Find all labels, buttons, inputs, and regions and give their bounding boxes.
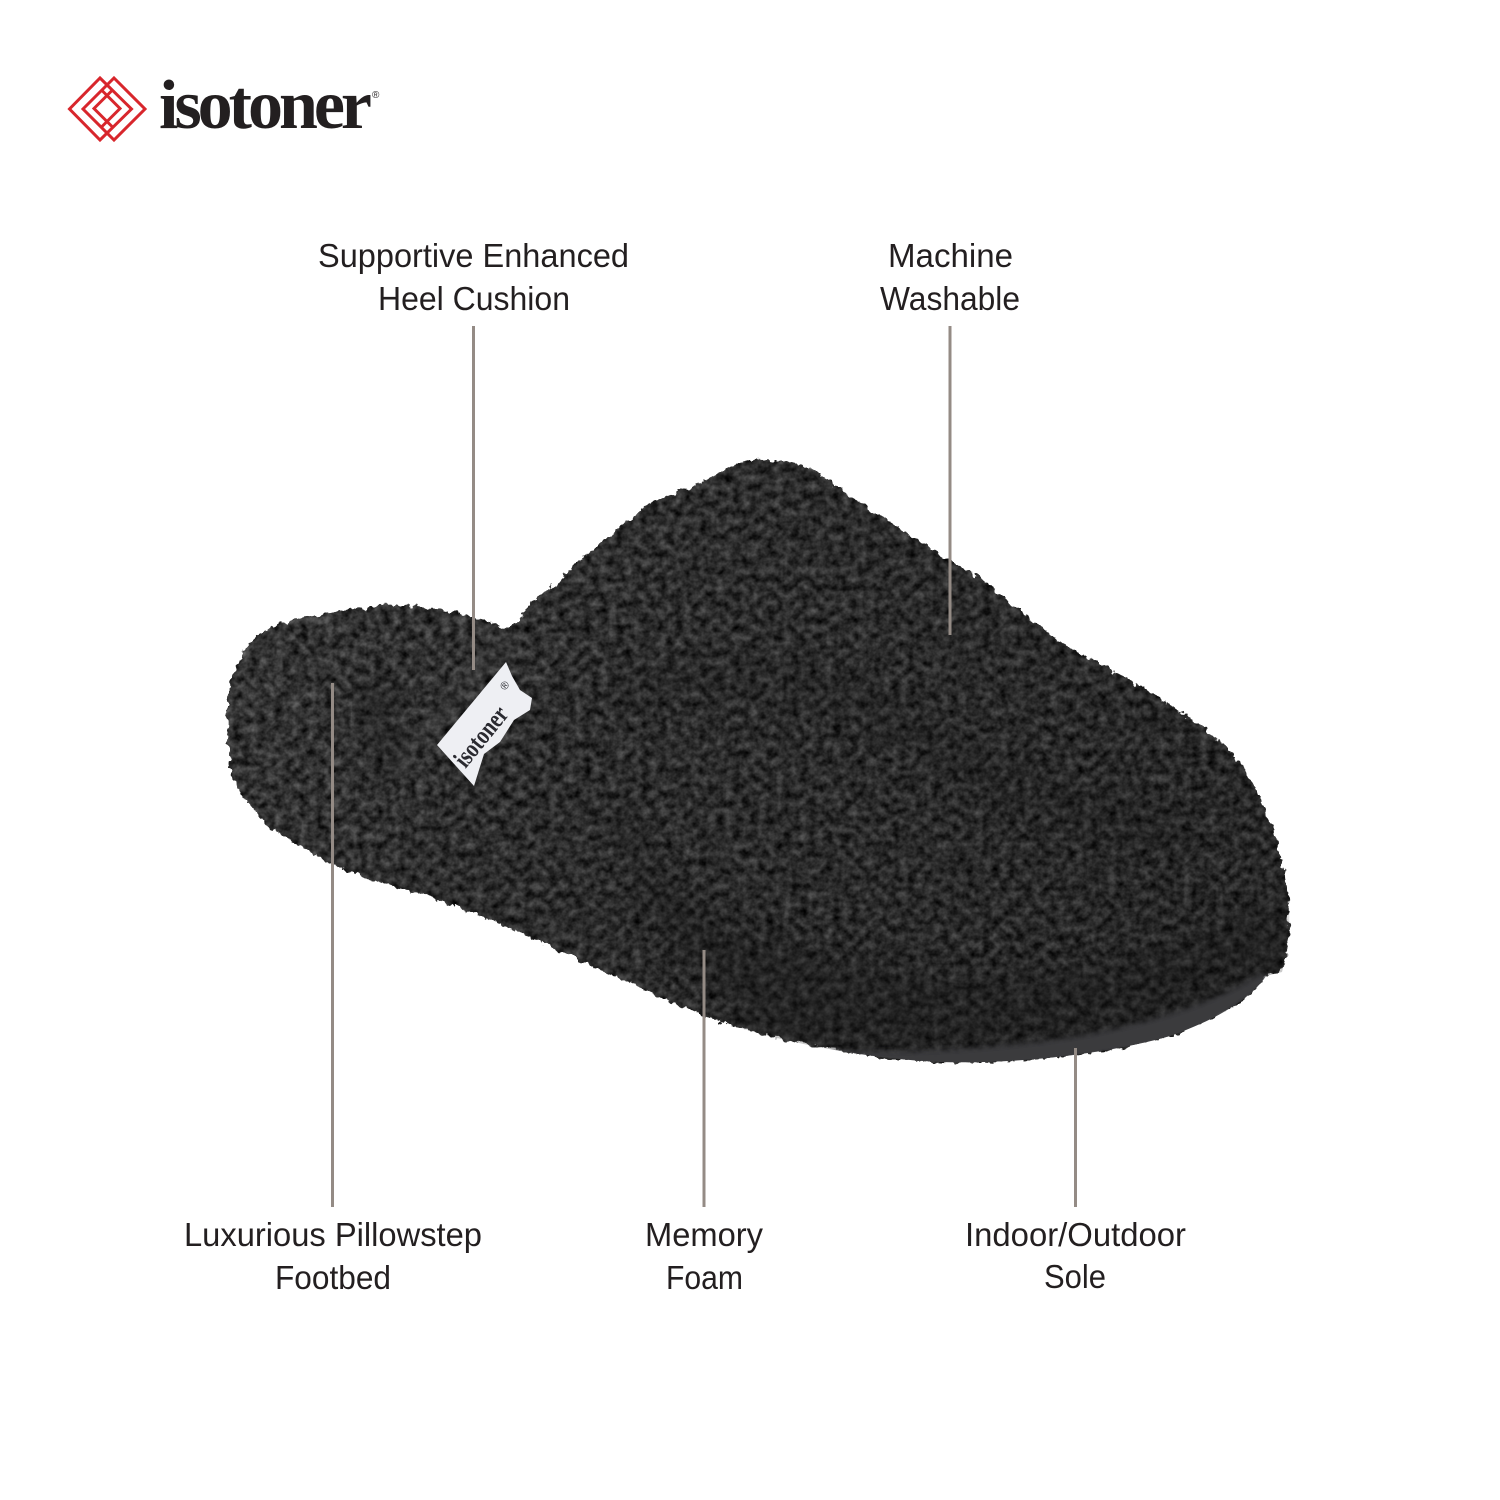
label text [184, 1216, 482, 1296]
callout: heel cushion [318, 237, 629, 670]
icon: red nested diamonds [70, 78, 145, 140]
collar ridge [397, 648, 506, 768]
callout: pillowstep footbed [184, 683, 482, 1296]
label brand text: isotoner [448, 700, 514, 773]
leader line [702, 950, 706, 1207]
label text: Foam [666, 1259, 743, 1296]
logo wordmark: isotoner [159, 67, 372, 144]
leader line [472, 326, 475, 670]
label text: Indoor/Outdoor [965, 1216, 1186, 1253]
label text: Sole [1044, 1258, 1106, 1295]
label text: Washable [880, 280, 1020, 317]
sole edge [830, 972, 1270, 1070]
logo: isotoner [70, 67, 380, 144]
slipper fur body [227, 460, 1289, 1062]
label text: Memory [645, 1216, 763, 1253]
label text [880, 237, 1020, 317]
callout: machine washable [880, 237, 1020, 635]
label text: Footbed [275, 1259, 391, 1296]
label text [965, 1216, 1186, 1295]
sewn-in label [437, 662, 532, 786]
callout: indoor/outdoor sole [965, 1048, 1186, 1295]
label text: Machine [888, 237, 1013, 274]
label text [318, 237, 629, 317]
label registered mark: ® [498, 679, 512, 693]
callout: memory foam [645, 950, 763, 1296]
label text [645, 1216, 763, 1296]
label text: Supportive Enhanced [318, 237, 629, 274]
label text: Luxurious Pillowstep [184, 1216, 482, 1253]
slipper shading [360, 640, 1290, 1070]
leader line [331, 683, 334, 1207]
label text: Heel Cushion [378, 280, 570, 317]
registered mark: ® [372, 90, 380, 101]
leader line [948, 326, 952, 635]
leader line [1074, 1048, 1077, 1207]
slipper photo illustration [227, 460, 1290, 1070]
